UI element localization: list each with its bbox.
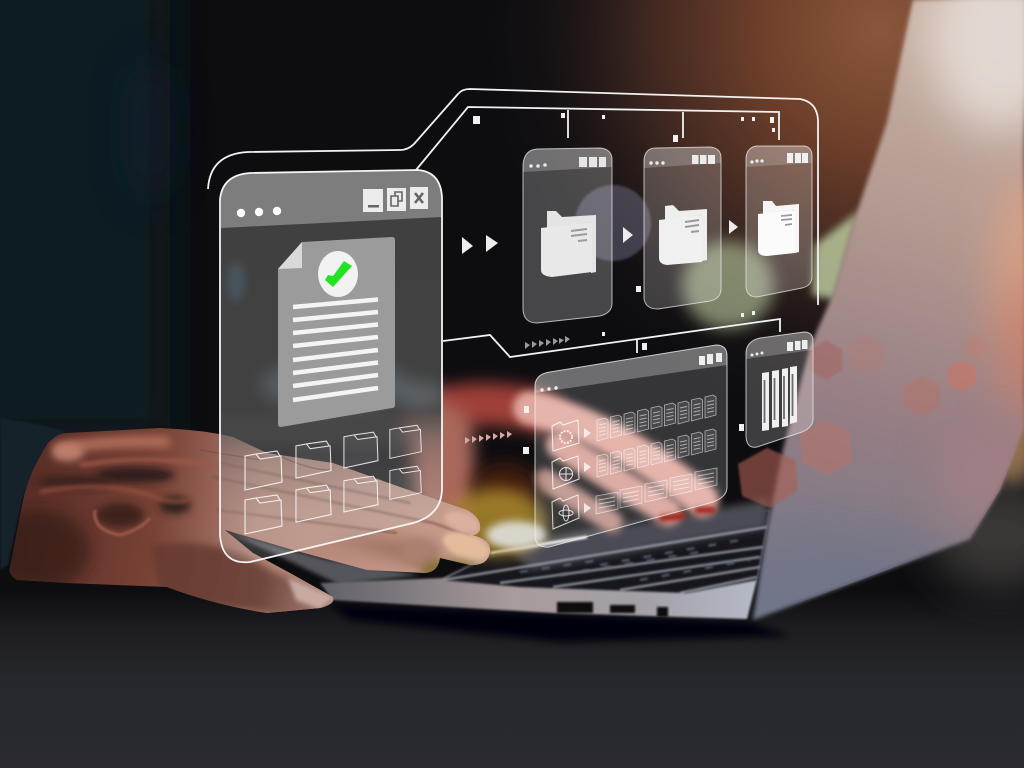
title bar C [746,146,812,167]
close button [410,187,428,209]
small square markers [473,113,775,454]
binders icon [762,366,797,431]
panel: wide file list window D [535,345,727,547]
folder icon A [541,211,596,277]
main window outline [220,170,442,562]
lens glow near keyboard [450,462,546,556]
bokeh lights [575,185,986,508]
restore button [387,188,406,211]
controls D [540,353,722,392]
connector lines [208,89,818,357]
title bar E [746,332,813,359]
flow arrows [462,220,738,254]
tiny gray arrows row [525,336,570,349]
folder outline grid [245,425,421,534]
window title bar [221,170,442,228]
globe folder icon [552,456,579,489]
check badge [318,251,358,297]
table surface [0,480,1024,768]
panel: folder window B [644,147,721,309]
controls C [750,153,808,164]
atom folder icon [552,495,579,529]
controls A [529,157,606,168]
document row two [597,429,716,477]
sleeve [0,418,66,570]
folder icon C [758,201,799,256]
gear folder icon [552,420,579,451]
tiny arrows over hand [465,431,512,444]
title bar dots [237,207,281,217]
blurred right hand [420,404,712,522]
title bar A [523,148,612,172]
laptop base and keyboard [228,500,790,642]
row arrows [584,428,591,513]
document text lines [293,300,378,400]
controls B [649,155,715,165]
left hand [0,428,493,620]
minimize button [363,189,383,212]
laptop lid [753,0,1024,620]
folder icon B [659,205,707,265]
title bar B [644,147,721,168]
panel row three [596,468,717,514]
panel: main document window [220,170,442,562]
document row one [597,395,716,441]
panel: folder window C [746,146,812,297]
green bokeh behind lid edge [812,210,860,300]
panel: binder window E [746,332,813,447]
panel: folder window A [523,148,612,323]
controls E [750,340,808,356]
title bar D [535,345,727,393]
document icon [278,237,395,427]
